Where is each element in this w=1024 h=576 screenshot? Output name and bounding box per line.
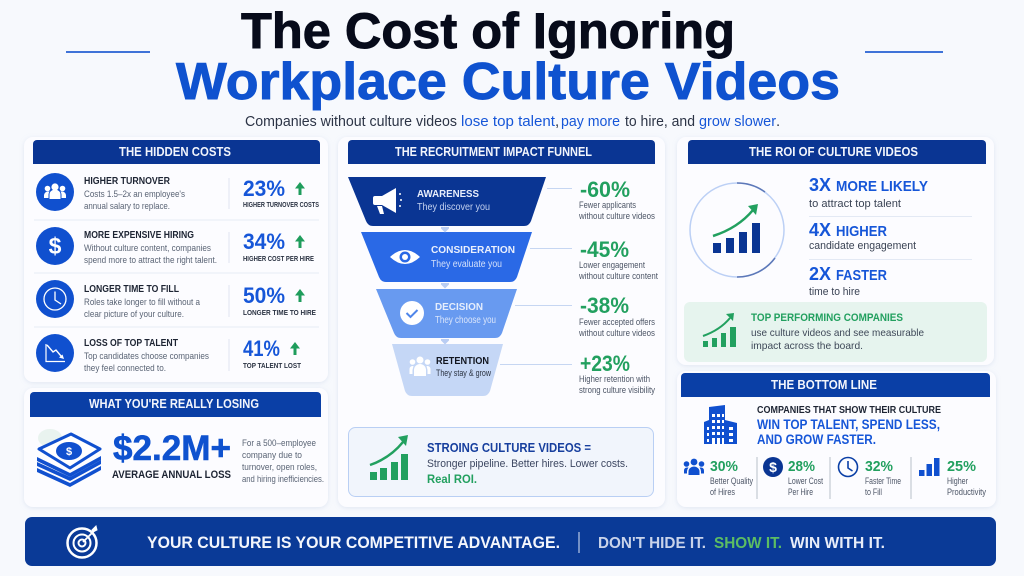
funnel stage: retention	[392, 344, 503, 396]
icon: clock	[838, 458, 858, 476]
stat: 28%: Per Hire	[788, 487, 813, 497]
icon: up arrow	[290, 342, 300, 355]
row: higher turnover	[36, 173, 319, 211]
panel: recruitment impact funnel	[338, 137, 665, 507]
row: more expensive hiring: spend more to attract the right talent.	[84, 255, 217, 265]
heading: funnel: THE RECRUITMENT IMPACT FUNNEL	[395, 145, 592, 159]
funnel stage: awareness: AWARENESS	[417, 188, 479, 200]
row: higher turnover: annual salary to replace.	[84, 201, 170, 211]
icon: people	[36, 173, 74, 211]
icon: check circle	[400, 301, 424, 325]
callout: strong culture videos	[348, 428, 654, 496]
row: more expensive hiring: 34%	[243, 229, 285, 254]
icon: clock	[36, 280, 74, 318]
panel: the bottom line: WIN TOP TALENT, SPEND LESS,	[757, 417, 940, 432]
funnel stage: awareness	[348, 177, 546, 226]
icon: dollar: $	[769, 459, 777, 475]
heading: roi: THE ROI OF CULTURE VIDEOS	[749, 145, 918, 159]
icon: growth chart	[370, 435, 408, 480]
stat: -45%: without culture content	[578, 271, 658, 281]
stat: 2x: FASTER	[836, 267, 887, 284]
row: loss of top talent	[36, 334, 302, 373]
footer banner: YOUR CULTURE IS YOUR COMPETITIVE ADVANTAGE.	[147, 534, 560, 552]
footer banner: DON'T HIDE IT.	[598, 535, 706, 552]
callout: strong culture videos: STROING CULTURE VIDEOS =	[427, 441, 591, 455]
funnel stage: retention: RETENTION	[436, 355, 489, 367]
heading: bottom line: THE BOTTOM LINE	[771, 378, 877, 392]
row: longer time to fill: 50%	[243, 283, 285, 308]
panel: what you're really losing: $2.2M+	[113, 429, 231, 468]
stat: 3x: 3X	[809, 174, 832, 195]
icon: dollar	[36, 227, 74, 265]
footer banner: WIN WITH IT.	[790, 535, 885, 552]
stat: 32%: to Fill	[865, 487, 882, 497]
stat: 28%: Lower Cost	[788, 476, 823, 486]
icon: up arrow	[295, 289, 305, 302]
subtitle: .	[776, 113, 780, 130]
stat: 25%: Higher	[947, 476, 968, 486]
funnel stage: consideration: CONSIDERATION	[431, 244, 515, 256]
stat: 32%	[838, 458, 901, 497]
stat: -60%: Fewer applicants	[579, 200, 637, 210]
text: loss explanation: turnover, open roles,	[242, 462, 317, 472]
title: The Cost of Ignoring	[241, 3, 735, 59]
stat: -38%: without culture videos	[578, 328, 656, 338]
stat: 2x: time to hire	[809, 286, 860, 298]
panel: the bottom line	[677, 371, 996, 507]
heading: funnel	[348, 140, 655, 164]
footer banner: SHOW IT.	[714, 535, 782, 552]
icon: dollar: $	[49, 233, 62, 259]
funnel stage: decision	[376, 289, 517, 338]
row: loss of top talent: Top candidates choose companies	[84, 351, 209, 361]
callout: top performing companies: impact across the board.	[751, 340, 863, 352]
icon: declining chart	[36, 334, 74, 372]
text: loss explanation: For a 500–employee	[242, 438, 316, 448]
stat: 30%: 30%	[710, 458, 738, 475]
icon: money stack: $	[66, 446, 72, 458]
heading: what you're really losing	[30, 392, 321, 417]
row: more expensive hiring: HIGHER COST PER HIRE	[243, 256, 314, 263]
subtitle	[245, 113, 780, 130]
stat: 30%	[684, 458, 753, 497]
panel: the bottom line: COMPANIES THAT SHOW THEIR CULTURE	[757, 405, 941, 416]
icon: up arrow	[295, 182, 305, 195]
funnel stage: decision: They choose you	[435, 315, 496, 326]
row: higher turnover: 23%	[243, 176, 285, 201]
text: loss explanation: and hiring inefficiencies.	[242, 474, 324, 484]
icon: eye	[390, 250, 420, 264]
funnel stage: decision: DECISION	[435, 301, 483, 313]
row: longer time to fill: clear picture of your culture.	[84, 309, 184, 319]
row: more expensive hiring: Without culture content, companies	[84, 243, 211, 253]
icon: bars	[919, 458, 940, 476]
heading: bottom line	[681, 373, 990, 397]
stat: 2x	[809, 263, 887, 298]
row: higher turnover: HIGHER TURNOVER	[84, 176, 171, 187]
callout: top performing companies	[684, 302, 987, 362]
heading: the hidden costs	[33, 140, 320, 164]
subtitle: grow slower	[699, 113, 776, 130]
icon: office building	[704, 405, 737, 444]
funnel stage: consideration: They evaluate you	[431, 259, 502, 270]
stat: +23%: +23%	[580, 351, 630, 376]
subtitle: pay more	[561, 113, 620, 130]
stat: -38%: -38%	[580, 293, 629, 318]
row: higher turnover: Costs 1.5–2x an employee's	[84, 189, 185, 199]
stat: 4x: 4X	[809, 219, 832, 240]
icon: people	[684, 459, 704, 475]
title	[176, 3, 840, 111]
stat: 32%: 32%	[865, 458, 893, 475]
stat: -60%: -60%	[580, 177, 630, 202]
stat: -38%	[578, 293, 656, 338]
row: loss of top talent: 41%	[243, 336, 280, 361]
callout: top performing companies: use culture videos and see measurable	[751, 327, 924, 339]
funnel stage: consideration	[361, 232, 532, 282]
text: loss explanation	[242, 438, 324, 484]
row: more expensive hiring: MORE EXPENSIVE HIRING	[84, 230, 194, 241]
row: longer time to fill: LONGER TIME TO HIRE	[243, 310, 316, 317]
panel: the bottom line: AND GROW FASTER.	[757, 432, 876, 447]
stat: 25%: Productivity	[947, 487, 987, 497]
stat: 3x: to attract top talent	[809, 198, 901, 210]
stat: 30%: Better Quality	[710, 476, 753, 486]
subtitle: Companies without culture videos	[245, 113, 457, 130]
row: loss of top talent: they feel connected to.	[84, 363, 166, 373]
stat: 25%	[919, 458, 987, 497]
stat: 2x: 2X	[809, 263, 832, 284]
heading: roi	[688, 140, 986, 164]
row: longer time to fill	[36, 280, 316, 319]
stat: -38%: Fewer accepted offers	[579, 317, 656, 327]
title: Workplace Culture Videos	[176, 53, 840, 111]
stat: -45%: -45%	[580, 237, 629, 262]
stat: 32%: Faster Time	[865, 476, 901, 486]
panel: what you're really losing	[24, 388, 328, 507]
stat: 3x	[809, 174, 928, 210]
panel: roi of culture videos	[677, 137, 994, 365]
stat: -60%	[578, 177, 656, 221]
icon: money stack	[37, 434, 101, 487]
icon: growth chart	[703, 313, 736, 347]
stat: +23%	[579, 351, 656, 395]
row: loss of top talent: LOSS OF TOP TALENT	[84, 338, 178, 349]
heading: what you're really losing: WHAT YOU'RE REALLY LOSING	[89, 397, 259, 411]
stat: 28%: 28%	[788, 458, 815, 475]
panel: what you're really losing: AVERAGE ANNUAL LOSS	[112, 469, 231, 481]
icon: megaphone	[373, 188, 402, 214]
icon: people	[410, 356, 430, 376]
funnel stage: retention: They stay & grow	[436, 368, 491, 378]
chart: circular growth icon	[690, 183, 784, 277]
row: longer time to fill: Roles take longer to fill without a	[84, 297, 201, 307]
stat: 30%: of Hires	[710, 487, 735, 497]
row: higher turnover: HIGHER TURNOVER COSTS	[243, 202, 319, 209]
stat: 4x: candidate engagement	[809, 240, 916, 252]
funnel stage: awareness: They discover you	[417, 202, 490, 213]
stat: 4x: HIGHER	[836, 223, 887, 240]
stat: 28%	[763, 457, 823, 497]
subtitle: to hire, and	[625, 113, 695, 130]
text: loss explanation: company due to	[242, 450, 302, 460]
row: loss of top talent: TOP TALENT LOST	[243, 363, 302, 370]
panel: the hidden costs	[24, 137, 328, 382]
row: longer time to fill: LONGER TIME TO FILL	[84, 284, 179, 295]
callout: strong culture videos: Real ROI.	[427, 474, 477, 486]
row: more expensive hiring	[36, 227, 314, 265]
heading: the hidden costs: THE HIDDEN COSTS	[119, 145, 231, 159]
stat: 4x	[809, 219, 916, 252]
subtitle: lose top talent	[461, 113, 556, 130]
stat: -45%: Lower engagement	[579, 260, 645, 270]
icon: target	[68, 526, 97, 558]
stat: +23%: strong culture visibility	[579, 385, 656, 395]
subtitle: ,	[555, 113, 559, 130]
stat: +23%: Higher retention with	[579, 374, 650, 384]
icon: up arrow	[295, 235, 305, 248]
footer banner	[25, 517, 996, 566]
stat: 25%: 25%	[947, 458, 976, 475]
stat: -60%: without culture videos	[578, 211, 656, 221]
callout: strong culture videos: Stronger pipeline. Better hires. Lower costs.	[427, 458, 628, 470]
stat: 3x: MORE LIKELY	[836, 178, 928, 195]
callout: top performing companies: TOP PERFORMING COMPANIES	[751, 312, 903, 324]
stat: -45%	[578, 237, 658, 281]
